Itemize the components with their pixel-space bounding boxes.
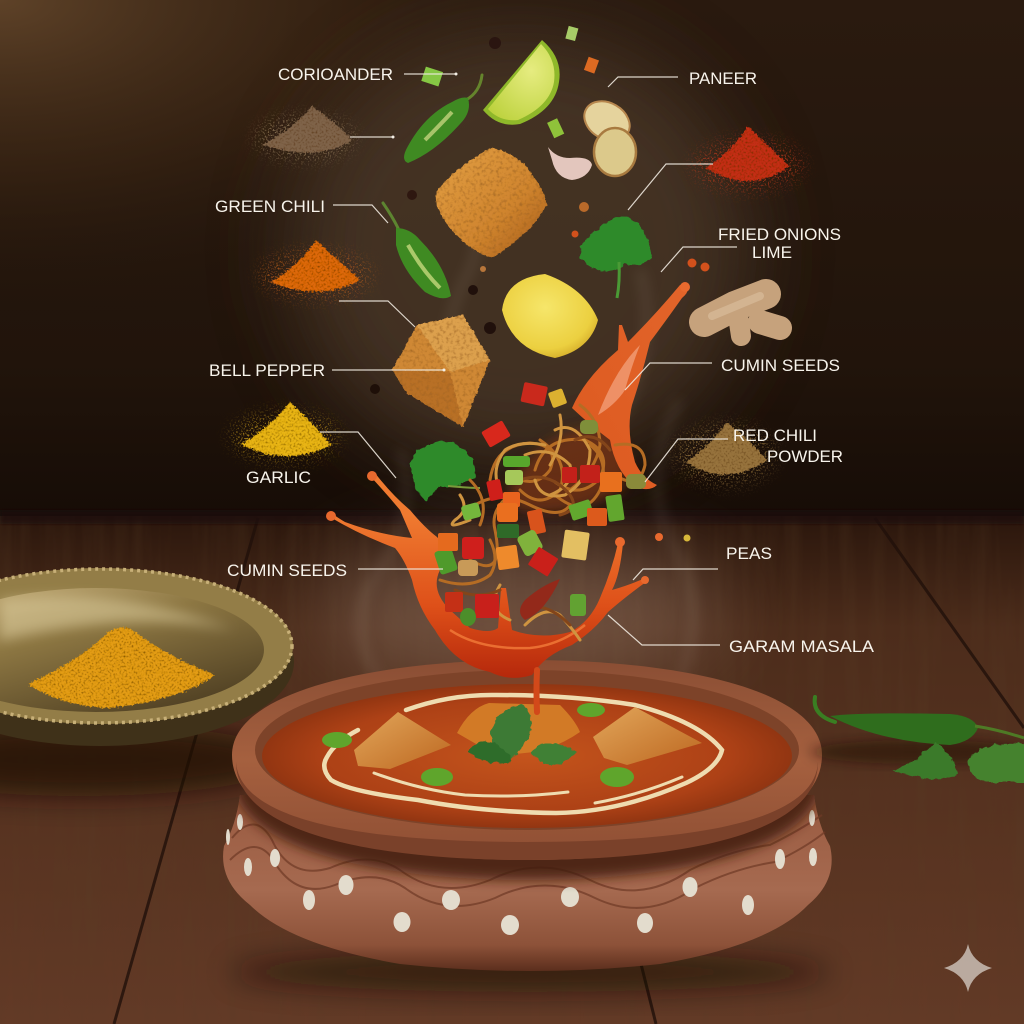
icon: garlic clove [548,147,592,180]
clay bowl [223,660,832,992]
leader: red chili pile [628,164,713,210]
label: paneer [608,70,757,88]
leader: cumin pile [350,136,394,138]
curry surface [262,684,792,828]
icon: fried paneer top [436,148,547,258]
icon: turmeric pile on plate [28,628,215,708]
callout labels [209,66,874,656]
icon: green chili top [404,75,482,163]
label: cumin seeds left: CUMIN SEEDS [227,562,347,580]
curry paneer chunks [354,703,702,769]
bowl rim [232,660,822,860]
label: fried onions lime: LIME [752,244,792,262]
label: cumin seeds right [625,357,840,390]
label: bell pepper [209,362,446,380]
label: garlic [246,432,396,487]
icon: fried paneer lower [392,315,490,427]
cream swirl [324,695,722,813]
icon: coriander leaf top [580,218,652,298]
icon: potato [502,274,598,358]
spice pile: orange chili [259,240,371,299]
label: coriander: CORIOANDER [278,66,393,84]
flying bits [370,26,710,542]
label: green chili [215,198,388,223]
steam [360,180,693,680]
chili and coriander on table [810,697,1024,782]
sauce splash lower [326,471,663,712]
label: garlic: GARLIC [246,469,311,487]
label: garam masala [608,615,874,656]
label: garam masala: GARAM MASALA [729,638,874,656]
label: paneer: PANEER [689,70,757,88]
background wall [0,0,1024,520]
label: peas: PEAS [726,545,772,563]
icon: ginger slices [577,93,637,176]
bowl body [223,795,832,971]
coriander garnish [466,704,576,765]
label: peas [633,545,772,580]
spice pile: cumin [255,106,355,160]
spice pile: red chili powder [692,126,804,191]
icon: green chili middle [383,203,451,298]
bowl dots [226,810,817,935]
label: fried onions lime [661,226,841,272]
label: cumin seeds right: CUMIN SEEDS [721,357,840,375]
wooden table [0,510,1024,1024]
vegetable pieces [434,382,646,626]
icon: ginger root [704,294,780,336]
sauce splash upper [572,282,690,489]
icon: lime wedge [483,40,560,125]
icon: coriander leaf lower [411,441,480,502]
label: red chili powder: POWDER [767,448,843,466]
label: red chili powder: RED CHILI [733,427,817,445]
icon: sparkle watermark [944,944,992,992]
peas in curry [322,703,634,787]
fried onions [440,405,645,640]
label: green chili: GREEN CHILI [215,198,325,216]
spice pile: turmeric [231,402,339,461]
label: red chili powder [645,427,843,482]
label: bell pepper: BELL PEPPER [209,362,325,380]
warm sauce behind vegetables [510,428,628,512]
spice pile: garam masala [675,422,775,485]
leader: orange spice [339,301,415,327]
brass plate with turmeric [0,568,294,746]
label: coriander [278,66,458,84]
label: fried onions lime: FRIED ONIONS [718,226,841,244]
